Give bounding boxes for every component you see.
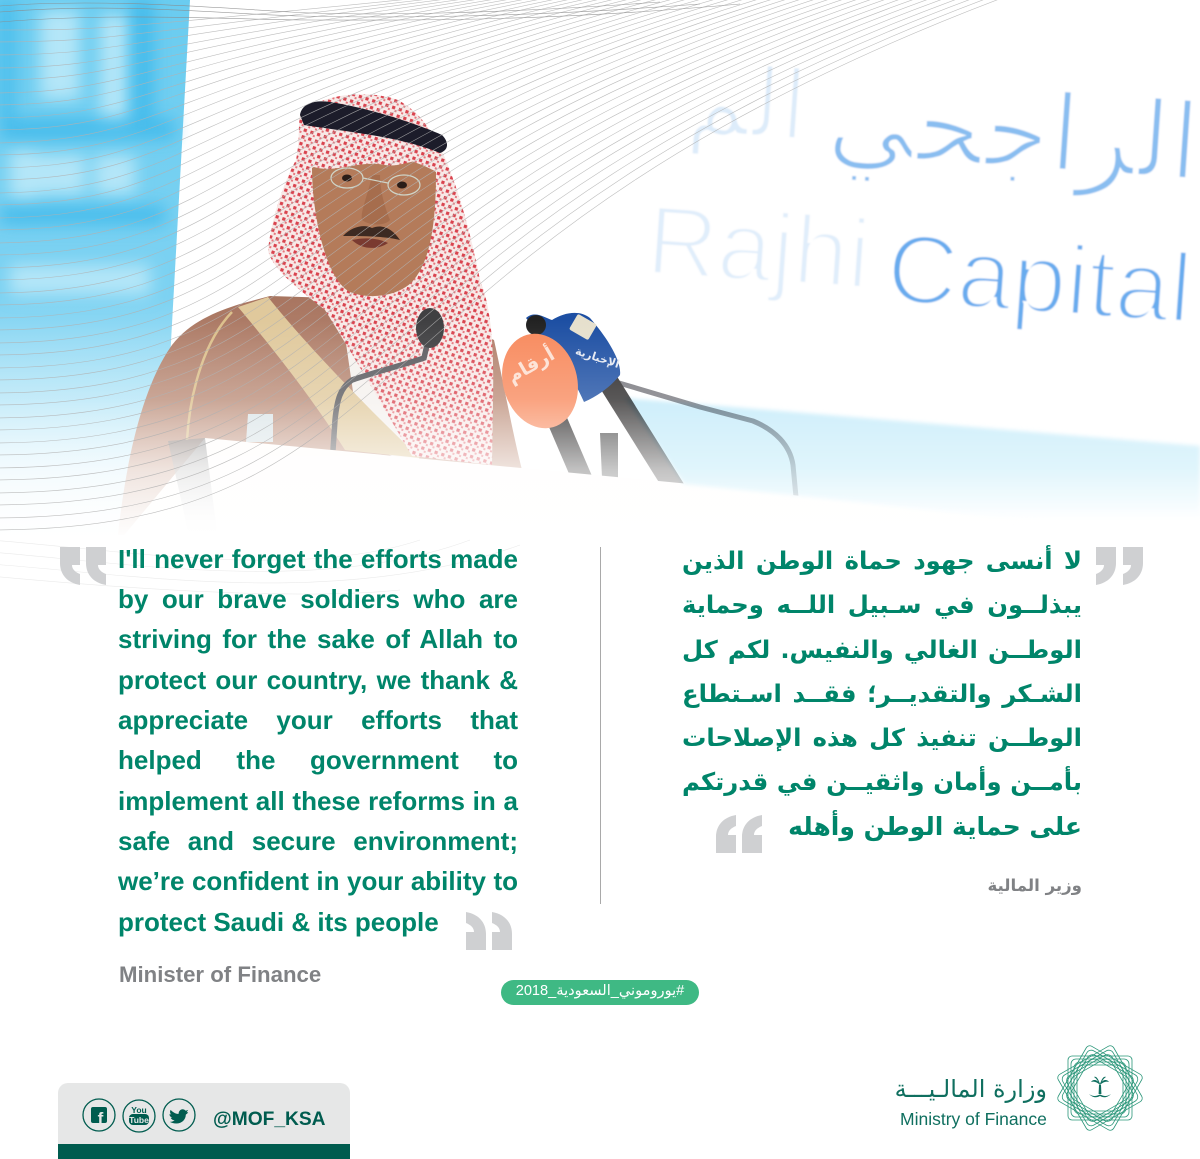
Arabic quote text: الوطــن الغالي والنفيس. لكم كل [682, 635, 1082, 664]
English quote text: we’re confident in your ability to [118, 866, 518, 896]
blue floor band on the right [625, 398, 1200, 540]
icon: Facebook: f [98, 1109, 104, 1128]
Arabic quote text: بأمــن وأمان واثقيــن في قدرتكم [682, 767, 1082, 796]
photo: minister at podium [118, 94, 796, 540]
icon: YouTube: Tube [129, 1115, 149, 1125]
English ministry name: Ministry of Finance [900, 1109, 1047, 1129]
quote mark: English opening [60, 547, 106, 585]
quote mark: English closing [466, 912, 512, 950]
English quote text: protect our country, we thank & [118, 665, 518, 695]
blurred Arabic screen text: الراجحي [824, 56, 1200, 206]
central divider [600, 547, 601, 904]
Arabic quote text: لا أنسى جهود حماة الوطن الذين [682, 546, 1082, 575]
English quote text: striving for the sake of Allah to [118, 624, 518, 654]
water bottle [246, 414, 273, 442]
social icons [82, 1098, 196, 1133]
blurred screen text: Rajhi: Rajhi [644, 184, 874, 310]
nose shadow [362, 175, 390, 224]
English quote text: appreciate your efforts that [118, 705, 518, 735]
quote mark: Arabic closing [716, 815, 762, 853]
handle: @MOF_KSA [213, 1109, 326, 1130]
icon: Twitter bird [170, 1109, 188, 1124]
podium microphone [333, 308, 444, 450]
dark green footer bar [58, 1144, 350, 1159]
hashtag pill [501, 980, 699, 1005]
face [312, 155, 436, 296]
podium [120, 438, 1200, 620]
social media panel [58, 1083, 350, 1159]
blurred screen text: Capital: Capital [883, 212, 1196, 344]
gold sash [238, 297, 420, 458]
robe [118, 296, 530, 540]
hashtag pill: #يوروموني_السعودية_2018 [516, 983, 684, 999]
quote mark: Arabic opening [1096, 547, 1143, 585]
orange and blue microphones [491, 313, 796, 497]
Arabic ministry name: وزارة المالـيـــة [895, 1075, 1047, 1103]
English attribution: Minister of Finance [119, 962, 321, 987]
orange and blue microphones: أرقام [502, 342, 558, 388]
English quote text: I'll never forget the efforts made [118, 544, 518, 574]
moustache [343, 226, 400, 240]
English quote text: safe and secure environment; [118, 826, 518, 856]
mouth [352, 238, 388, 248]
icon: YouTube [129, 1105, 149, 1125]
ministry logo [895, 1045, 1143, 1131]
Arabic attribution: وزير المالية [987, 876, 1082, 895]
fan of thin curved lines [0, 0, 1010, 530]
Arabic quote text: يبذلــون في سـبيل اللــه وحماية [682, 590, 1082, 619]
English quote text: protect Saudi & its people [118, 907, 439, 937]
Arabic quote text: الوطــن تنفيذ كل هذه الإصلاحات [682, 723, 1082, 752]
Arabic quote text: على حماية الوطن وأهله [788, 812, 1082, 841]
English quote text: by our brave soldiers who are [118, 584, 518, 614]
English quote text: helped the government to [118, 745, 518, 775]
Arabic quote text [682, 545, 1082, 842]
English quote text [118, 544, 518, 937]
palm and swords [1089, 1077, 1111, 1097]
white fade over the photograph [0, 320, 1200, 540]
ghutra folds over the forehead [298, 139, 444, 169]
blurred Arabic screen text, faded word: الم [684, 43, 811, 163]
black agal [300, 101, 447, 153]
icon: Facebook [91, 1107, 107, 1128]
checked ghutra [268, 94, 493, 465]
blurred blue panel on the left [0, 0, 190, 540]
thin gold trim [187, 312, 232, 440]
white collar and thobe [338, 282, 420, 470]
Arabic quote text: الشـكر والتقديــر؛ فقــد اسـتطاع [682, 679, 1082, 708]
icon: YouTube: You [131, 1105, 147, 1115]
rosette emblem [1057, 1045, 1143, 1131]
English quote text: implement all these reforms in a [118, 786, 518, 816]
glasses and eyes [331, 168, 420, 195]
orange and blue microphones: الإخبارية [574, 344, 621, 371]
